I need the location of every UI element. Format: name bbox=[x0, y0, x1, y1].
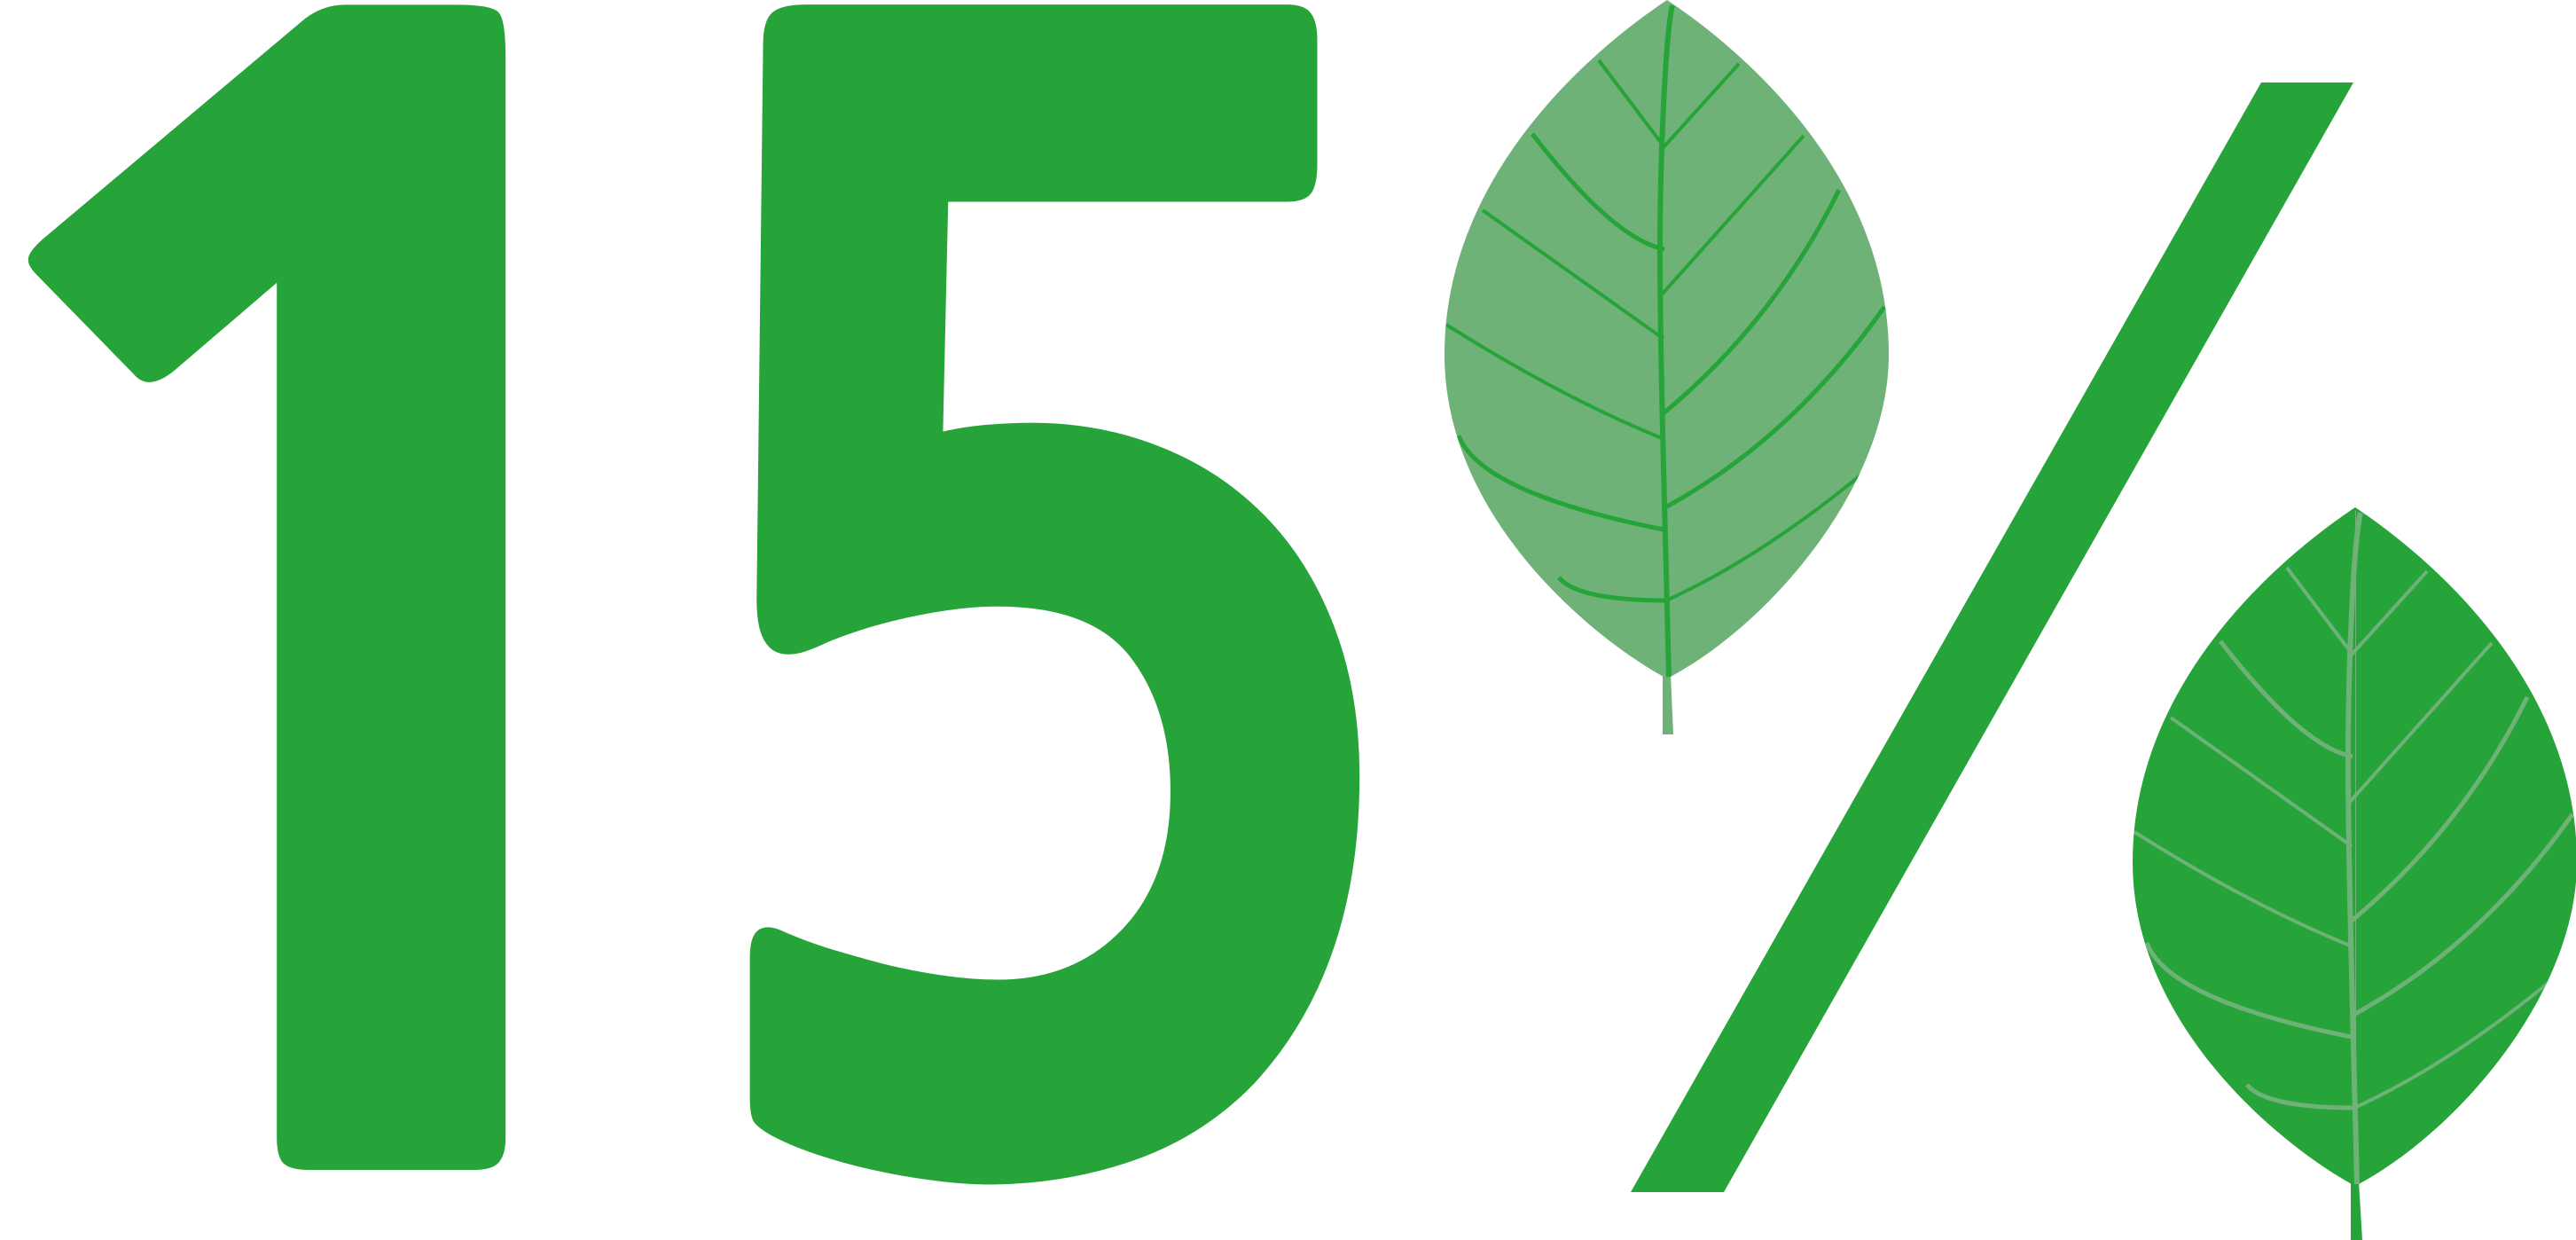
percent sign slash bbox=[1631, 82, 2353, 1192]
icon: dark leaf, bottom of percent sign bbox=[2133, 507, 2576, 1240]
icon: light leaf, top of percent sign bbox=[1445, 0, 1889, 734]
